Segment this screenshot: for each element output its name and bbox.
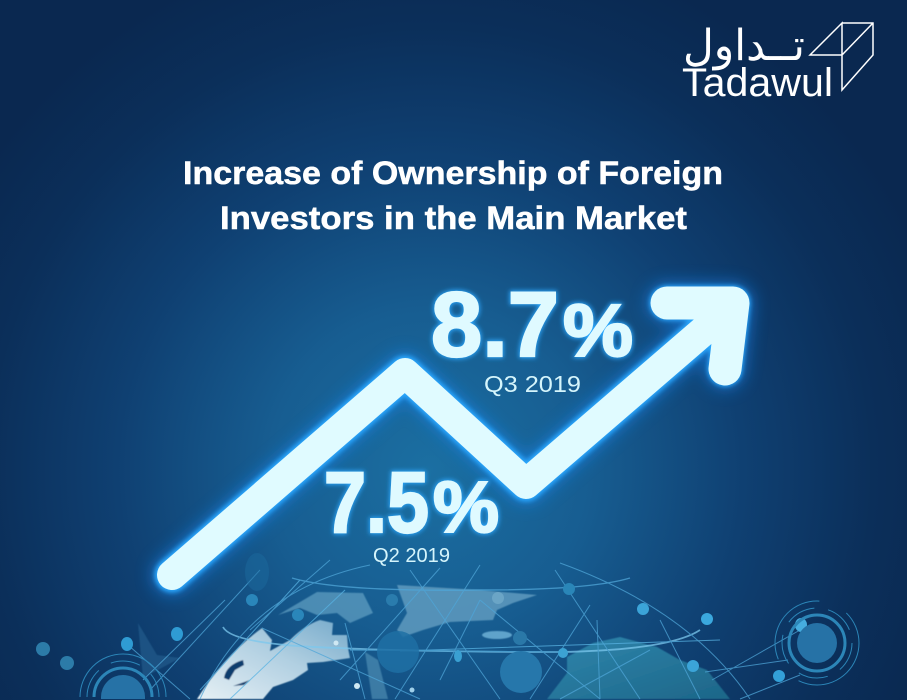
glowing trend arrow [172, 303, 733, 575]
logo: Tadawul [682, 21, 873, 105]
value period: Q3 2019 [484, 371, 581, 397]
title [183, 155, 723, 236]
globe nodes [36, 553, 807, 693]
value number [431, 274, 633, 376]
title: Increase of Ownership of Foreign [183, 155, 723, 191]
value number: % [563, 289, 633, 372]
value glow: % [433, 468, 499, 548]
value number: 7.5 [324, 455, 429, 551]
target circle left [80, 654, 166, 699]
title: Investors in the Main Market [220, 200, 687, 236]
value glow: 7.5 [324, 455, 429, 551]
value number: 8.7 [431, 274, 559, 376]
logo latin wordmark: Tadawul [682, 61, 833, 105]
value glow: % [563, 289, 633, 372]
value glow: 8.7 [431, 274, 559, 376]
value: 8.7% Q3 2019 [431, 274, 633, 397]
target circle right [775, 601, 859, 685]
globe with network lines [36, 553, 859, 699]
value number [324, 455, 499, 551]
globe orbit lines [128, 560, 800, 699]
value glow [324, 455, 499, 551]
value period: Q2 2019 [373, 545, 450, 567]
logo cube icon [810, 23, 873, 90]
value glow [431, 274, 633, 376]
value number: % [433, 468, 499, 548]
logo arabic wordmark: تــداول [683, 21, 805, 71]
globe continents [138, 585, 730, 699]
value: 7.5% Q2 2019 [324, 455, 499, 567]
